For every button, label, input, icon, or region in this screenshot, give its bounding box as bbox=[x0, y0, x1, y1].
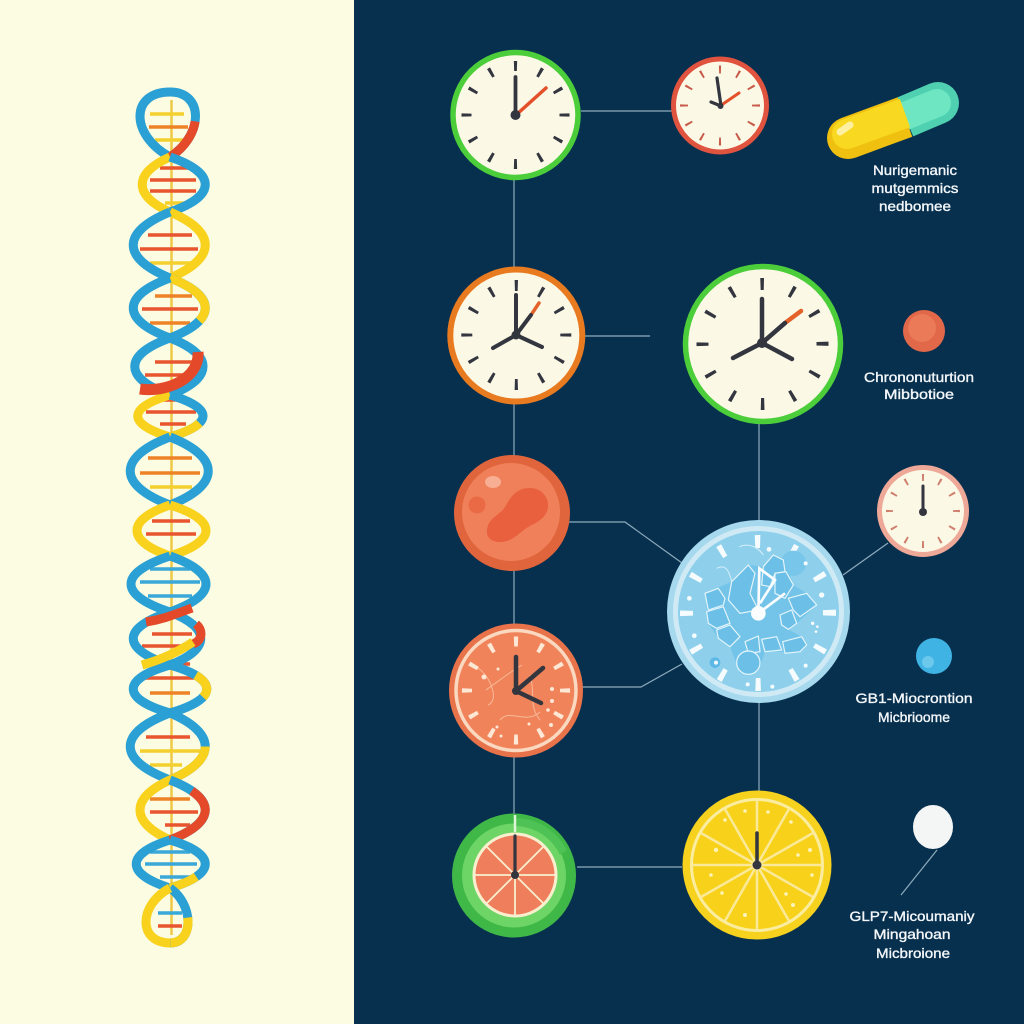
large blue microbiome clock bbox=[667, 520, 850, 703]
panel: left cream background bbox=[0, 0, 354, 1024]
icon: orange ball bbox=[903, 310, 945, 352]
label: GB1 microbiome: Micbrioome bbox=[878, 709, 950, 725]
label: GLP1 microbiome: Micbroione bbox=[876, 945, 950, 961]
label: nutrigenomics: Nurigemanic bbox=[873, 162, 957, 178]
label: nutrigenomics: mutgemmics bbox=[872, 180, 958, 196]
label: GLP1 microbiome bbox=[850, 908, 974, 961]
clock: green rind citrus bbox=[452, 814, 576, 938]
label: nutrigenomics: nedbomee bbox=[879, 198, 951, 214]
panel: right navy background bbox=[354, 0, 1024, 1024]
label: GB1 microbiome bbox=[856, 690, 972, 725]
label: nutrigenomics bbox=[872, 162, 958, 214]
clock: coral microbiome bbox=[449, 624, 583, 758]
clock: second row large green bbox=[686, 266, 840, 422]
connector lines bbox=[514, 111, 937, 895]
DNA double helix bbox=[130, 92, 208, 943]
label: chrononutrition: Mibbotioe bbox=[884, 386, 954, 402]
label: GB1 microbiome: GB1-Miocrontion bbox=[856, 690, 972, 706]
label: GLP1 microbiome: Mingahoan bbox=[874, 926, 950, 942]
clock: second row orange bbox=[450, 270, 582, 402]
icon: white pill bbox=[913, 805, 953, 849]
label: GLP1 microbiome: GLP7-Micoumaniy bbox=[850, 908, 974, 924]
icon: capsule pill bbox=[827, 82, 959, 159]
label: chrononutrition: Chrononuturtion bbox=[864, 369, 974, 385]
red blood cell bbox=[454, 455, 570, 571]
label: chrononutrition bbox=[864, 369, 974, 402]
clock: lemon slice bbox=[682, 790, 832, 940]
clock: top left green bbox=[453, 52, 578, 178]
clock: top right red bbox=[674, 59, 766, 152]
clock: small pink bbox=[880, 468, 966, 554]
icon: blue ball bbox=[916, 638, 952, 674]
